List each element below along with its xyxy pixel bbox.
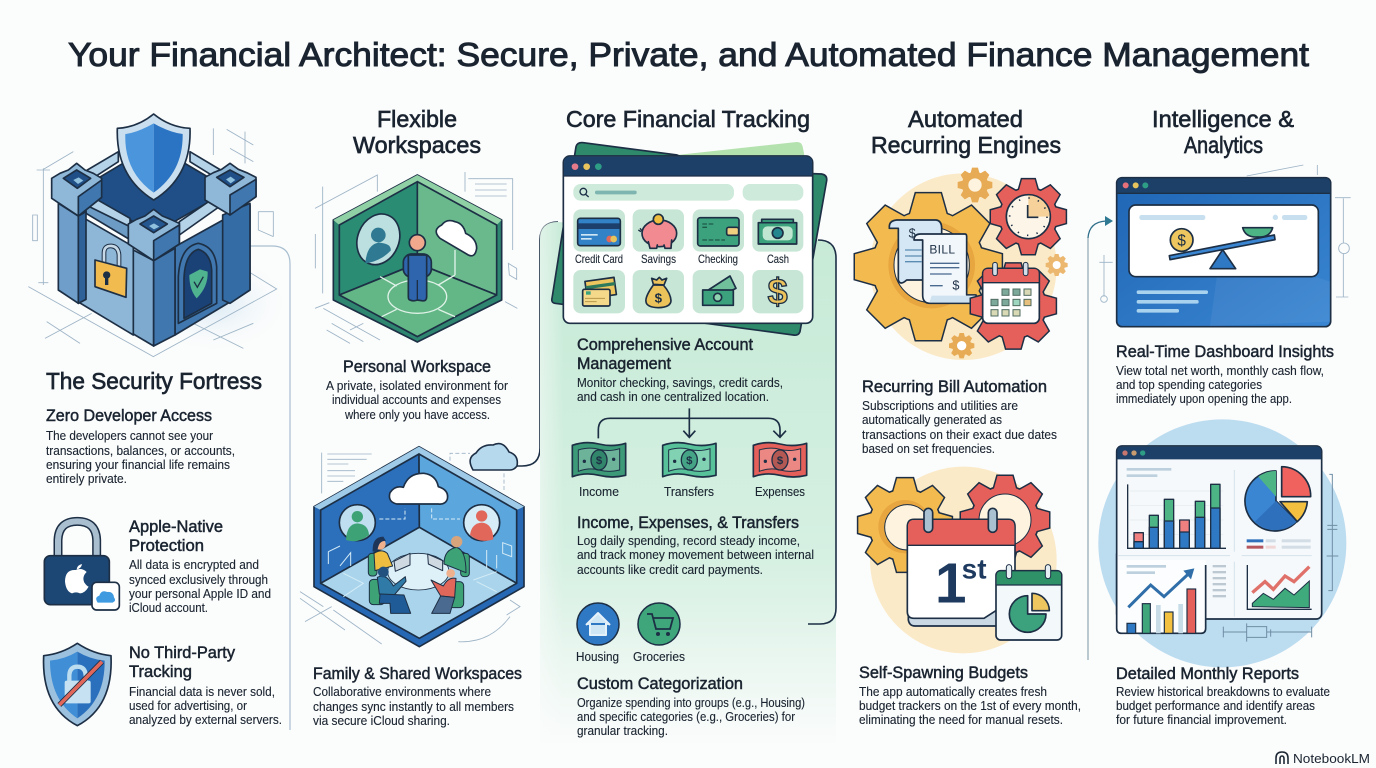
icon: housing: Housing (576, 650, 619, 664)
icon: credit card (578, 218, 620, 246)
cloud on wall (436, 221, 477, 256)
text: apple-native protection: All data is encrypted and (129, 558, 259, 572)
illustration: self-spawning calendar (858, 467, 1062, 653)
text: personal workspace: A private, isolated environment for (326, 379, 508, 393)
text: recurring bill automation: based on set frequencies. (862, 442, 995, 456)
text: self-spawning budgets: Self-Spawning Budgets (859, 663, 1028, 682)
text: income expenses transfers (577, 513, 814, 577)
text: custom categorization: and specific categories (e.g., Groceries) for (577, 710, 795, 724)
icon: income bill (572, 443, 626, 477)
text: family and shared workspaces (313, 664, 522, 728)
trend chart card (1117, 553, 1226, 633)
text: comprehensive account management (577, 335, 783, 404)
text: comprehensive account management: Management (577, 354, 671, 373)
icon: apple lock (44, 521, 119, 610)
account labels: Savings (641, 252, 676, 266)
diagram: money flow (572, 408, 807, 499)
column: flexible workspaces (300, 106, 558, 728)
bill dollar signs: $ (686, 455, 693, 467)
illustration: monthly reports (1098, 419, 1346, 667)
icon: balance scale (1169, 228, 1275, 269)
bills: $ (952, 278, 959, 292)
icon: money bag (646, 277, 671, 308)
heading: intelligence and analytics: Analytics (1184, 132, 1263, 158)
laptops (394, 553, 410, 571)
flow labels (579, 485, 805, 499)
icon: crossed shield (44, 643, 111, 726)
text: comprehensive account management: and cash in one centralized location. (577, 390, 769, 404)
bills: BILL (929, 242, 955, 256)
icon: credit cards stack (583, 277, 616, 306)
icon: wallet (698, 218, 739, 246)
text: income expenses transfers: and track money movement between internal (577, 548, 814, 562)
text: personal workspace: where only you have access. (344, 408, 490, 422)
text: income expenses transfers: Income, Expenses, & Transfers (577, 513, 799, 532)
towers (52, 163, 102, 216)
text: no third-party tracking: Financial data is never sold, (129, 685, 275, 699)
icon: fortress (28, 114, 290, 357)
text: no third-party tracking: No Third-Party (129, 643, 235, 662)
text: no third-party tracking: analyzed by external servers. (129, 713, 282, 727)
area chart (1247, 565, 1312, 609)
illustration: dashboard window (1099, 165, 1351, 327)
bills (889, 220, 976, 303)
text: real-time dashboard insights: Real-Time Dashboard Insights (1116, 342, 1334, 361)
account labels (575, 252, 789, 266)
door with shield (178, 243, 217, 323)
bar chart (1128, 484, 1226, 548)
text: zero developer access: The developers cannot see your (46, 429, 213, 443)
heading: automated recurring engines: Recurring Engines (871, 132, 1061, 158)
account labels: Credit Card (575, 252, 623, 266)
heading: automated recurring engines: Automated (908, 106, 1023, 132)
text: self-spawning budgets (859, 663, 1081, 727)
text: zero developer access: transactions, balances, or accounts, (46, 444, 235, 458)
text: family and shared workspaces: changes sync instantly to all members (313, 700, 514, 714)
table (388, 553, 449, 590)
title: Your Financial Architect: Secure, Private, and Automated Finance Management (68, 36, 1309, 73)
gear and calendar (971, 262, 1056, 348)
heading: intelligence and analytics: Intelligence & (1152, 106, 1294, 132)
text: real-time dashboard insights: View total net worth, monthly cash flow, (1116, 364, 1324, 378)
avatar red (464, 505, 500, 541)
text: income expenses transfers: Log daily spending, record steady income, (577, 534, 800, 548)
large calendar: 1 (935, 553, 967, 616)
text: zero developer access: ensuring your financial life remains (46, 458, 230, 472)
heading: automated recurring engines (871, 106, 1061, 158)
icon: money bag: $ (655, 290, 663, 305)
icon: padlock (95, 246, 127, 297)
text: real-time dashboard insights (1116, 342, 1334, 406)
text: zero developer access: entirely private. (46, 472, 127, 486)
text: no third-party tracking (129, 643, 282, 727)
icon: housing (576, 603, 619, 664)
text: recurring bill automation: transactions on their exact due dates (862, 428, 1057, 442)
icon: banknotes (703, 276, 736, 305)
connector: cloud to core tracking (470, 222, 558, 470)
text: comprehensive account management: Monitor checking, savings, credit cards, (577, 376, 783, 390)
text: family and shared workspaces: Family & Shared Workspaces (313, 664, 522, 683)
heading: flexible workspaces: Workspaces (353, 132, 481, 158)
gear and clock (991, 179, 1066, 254)
fortress walls (78, 145, 230, 233)
text: recurring bill automation: Recurring Bill Automation (862, 377, 1047, 396)
column: intelligence and analytics (1088, 106, 1351, 727)
connector line and arrow (1088, 216, 1113, 660)
small gears (949, 168, 1068, 358)
flow arrows (598, 408, 786, 438)
text: comprehensive account management: Comprehensive Account (577, 335, 753, 354)
text: recurring bill automation: automatically generated as (862, 413, 1002, 427)
text: family and shared workspaces: Collaborative environments where (313, 685, 491, 699)
heading: intelligence and analytics (1152, 106, 1294, 158)
text: detailed monthly reports: Review historical breakdowns to evaluate (1116, 685, 1330, 699)
text: income expenses transfers: accounts like credit card payments. (577, 563, 763, 577)
icon: cash (758, 219, 797, 244)
text: apple-native protection: your personal Apple ID and (129, 587, 271, 601)
text: self-spawning budgets: eliminating the need for manual resets. (859, 713, 1063, 727)
text: recurring bill automation: Subscriptions and utilities are (862, 399, 1018, 413)
avatar green (339, 505, 375, 541)
text: detailed monthly reports: for future financial improvement. (1116, 713, 1287, 727)
illustration: personal workspace room (315, 172, 517, 343)
icon: piggy bank (638, 214, 677, 248)
pie chart (1245, 467, 1311, 549)
account labels: Checking (698, 252, 738, 266)
connector line: fortress to workspaces (250, 246, 290, 730)
team members (368, 536, 469, 613)
text: apple-native protection: synced exclusively through (129, 573, 268, 587)
text: custom categorization: Organize spending into groups (e.g., Housing) (577, 696, 805, 710)
text: apple-native protection: iCloud account. (129, 601, 208, 615)
shield emblem (117, 114, 190, 200)
text: self-spawning budgets: budget trackers on the 1st of every month, (859, 699, 1081, 713)
large calendar (907, 508, 1015, 626)
heading: the security fortress: The Security Fortress (46, 368, 262, 394)
text: apple-native protection: Protection (129, 536, 204, 555)
heading: core financial tracking: Core Financial Tracking (566, 106, 810, 132)
text: detailed monthly reports: budget performance and identify areas (1116, 699, 1315, 713)
text: real-time dashboard insights: immediately upon opening the app. (1116, 392, 1292, 406)
text: real-time dashboard insights: and top spending categories (1116, 378, 1262, 392)
flow labels: Income (579, 485, 619, 499)
text: family and shared workspaces: via secure iCloud sharing. (313, 714, 450, 728)
bill dollar signs: $ (777, 455, 784, 467)
icon: dollar sign: $ (768, 271, 788, 312)
icon: groceries: Groceries (633, 650, 685, 664)
account labels: Cash (767, 252, 789, 266)
flow labels: Transfers (664, 485, 714, 499)
text: custom categorization: Custom Categorization (577, 674, 743, 693)
text: zero developer access (46, 406, 235, 486)
flow labels: Expenses (755, 485, 805, 499)
icon: groceries (633, 603, 685, 664)
column: automated recurring engines (855, 106, 1081, 727)
gear: yellow (855, 193, 1002, 340)
icon: transfers bill (663, 443, 716, 477)
text: recurring bill automation (862, 377, 1057, 456)
text: apple-native protection: Apple-Native (129, 517, 223, 536)
text: personal workspace: individual accounts and expenses (332, 393, 501, 407)
cloud (389, 473, 448, 504)
illustration: bill automation gears (855, 168, 1068, 360)
heading: flexible workspaces: Flexible (377, 106, 457, 132)
large calendar: st (962, 553, 987, 584)
text: no third-party tracking: Tracking (129, 662, 192, 681)
small pie calendar (996, 565, 1062, 640)
text: custom categorization: granular tracking. (577, 724, 668, 738)
icon: expenses bill (753, 443, 807, 477)
heading: flexible workspaces (353, 106, 481, 158)
column: core financial tracking (540, 106, 836, 747)
text: detailed monthly reports: Detailed Monthly Reports (1116, 664, 1299, 683)
illustration: shared workspace room (300, 447, 524, 647)
text: zero developer access: Zero Developer Access (46, 406, 212, 425)
text: apple-native protection (129, 517, 271, 615)
bills: $ (909, 226, 916, 240)
text: personal workspace: Personal Workspace (343, 357, 491, 376)
bill dollar signs: $ (596, 455, 603, 467)
person (403, 235, 431, 301)
column: the security fortress (28, 114, 290, 730)
text: self-spawning budgets: The app automatically creates fresh (859, 685, 1047, 699)
text: personal workspace (326, 357, 508, 422)
illustration: account manager window (552, 142, 827, 335)
bill dollar signs (596, 455, 784, 467)
notebooklm watermark: NotebookLM (1293, 751, 1370, 766)
text: detailed monthly reports (1116, 664, 1330, 727)
icon: balance scale: $ (1177, 232, 1186, 249)
panel: green background (540, 222, 836, 747)
text: custom categorization (577, 674, 805, 738)
avatar on wall (349, 207, 407, 271)
text: no third-party tracking: used for advertising, or (129, 699, 247, 713)
